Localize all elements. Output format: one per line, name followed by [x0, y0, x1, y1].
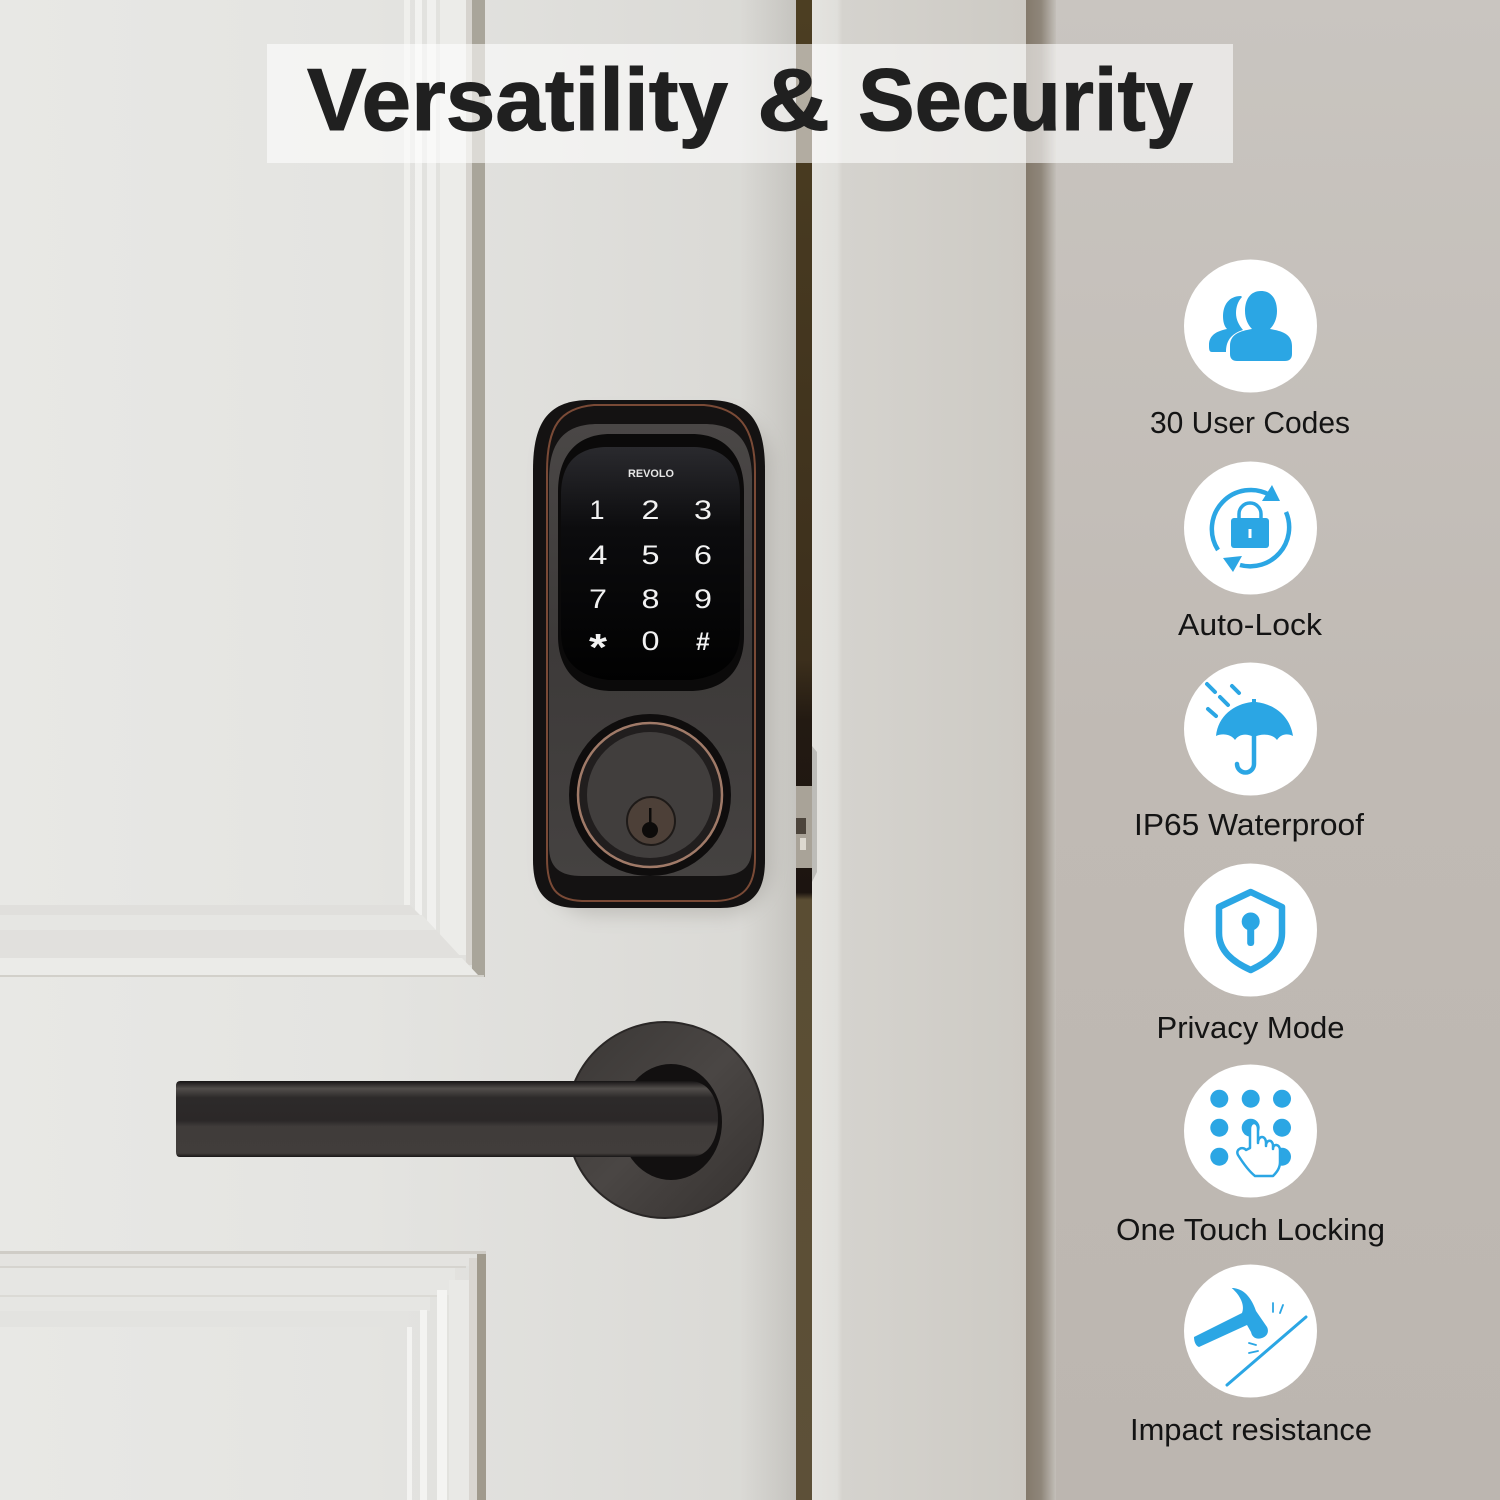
door frame: [812, 0, 1026, 1500]
feature: 30 User Codes: [1150, 260, 1350, 440]
keypad digits: 5: [642, 540, 660, 570]
feature: One Touch Locking: [1116, 1064, 1385, 1247]
strike plate and latch: [796, 746, 817, 882]
label: IP65 Waterproof: [1134, 807, 1364, 842]
feature: Privacy Mode: [1156, 864, 1344, 1045]
keypad digits: [588, 495, 712, 669]
label: Privacy Mode: [1156, 1010, 1344, 1045]
keypad digits: 1: [589, 495, 605, 525]
keypad digits: #: [696, 628, 710, 656]
key cylinder: [627, 797, 675, 845]
feature: Auto-Lock: [1178, 462, 1323, 642]
label: One Touch Locking: [1116, 1212, 1385, 1247]
gap between door and frame: [796, 0, 812, 1500]
door lower panel molding: [0, 1251, 486, 1500]
keypad digits: 0: [642, 626, 660, 656]
icon: shield keyhole: [1219, 892, 1282, 970]
brand: REVOLO: [628, 468, 674, 480]
title: Versatility: [307, 50, 728, 149]
keypad digits: 3: [694, 495, 712, 525]
keypad digits: 9: [694, 584, 712, 614]
keypad screen: [558, 434, 744, 691]
wall: [1026, 0, 1500, 1500]
feature: Impact resistance: [1130, 1264, 1372, 1447]
title: Security: [858, 50, 1193, 149]
lever: [176, 1081, 718, 1157]
label: Impact resistance: [1130, 1412, 1372, 1447]
smart lock: [533, 400, 771, 915]
icon: keypad touch: [1210, 1090, 1291, 1176]
keypad digits: 7: [589, 584, 607, 614]
lock body: [533, 400, 765, 908]
label: 30 User Codes: [1150, 405, 1350, 440]
icon: rotating lock: [1212, 485, 1289, 572]
icon: hammer striking surface: [1194, 1288, 1306, 1385]
keypad digits: *: [589, 627, 607, 669]
icon: users: [1209, 291, 1292, 361]
door background: [0, 0, 796, 1500]
rosette: [567, 1022, 763, 1218]
door upper panel molding: [0, 0, 485, 977]
keypad digits: 6: [694, 540, 712, 570]
keypad digits: 2: [642, 495, 660, 525]
title banner: [267, 44, 1233, 163]
keypad digits: 8: [642, 584, 660, 614]
icon: umbrella in rain: [1207, 684, 1293, 772]
label: Auto-Lock: [1178, 607, 1323, 642]
keypad digits: 4: [588, 540, 608, 570]
feature: IP65 Waterproof: [1134, 662, 1364, 842]
title: &: [757, 50, 830, 149]
door handle: [176, 1022, 763, 1218]
deadbolt: [569, 714, 731, 876]
title: [307, 50, 1193, 149]
